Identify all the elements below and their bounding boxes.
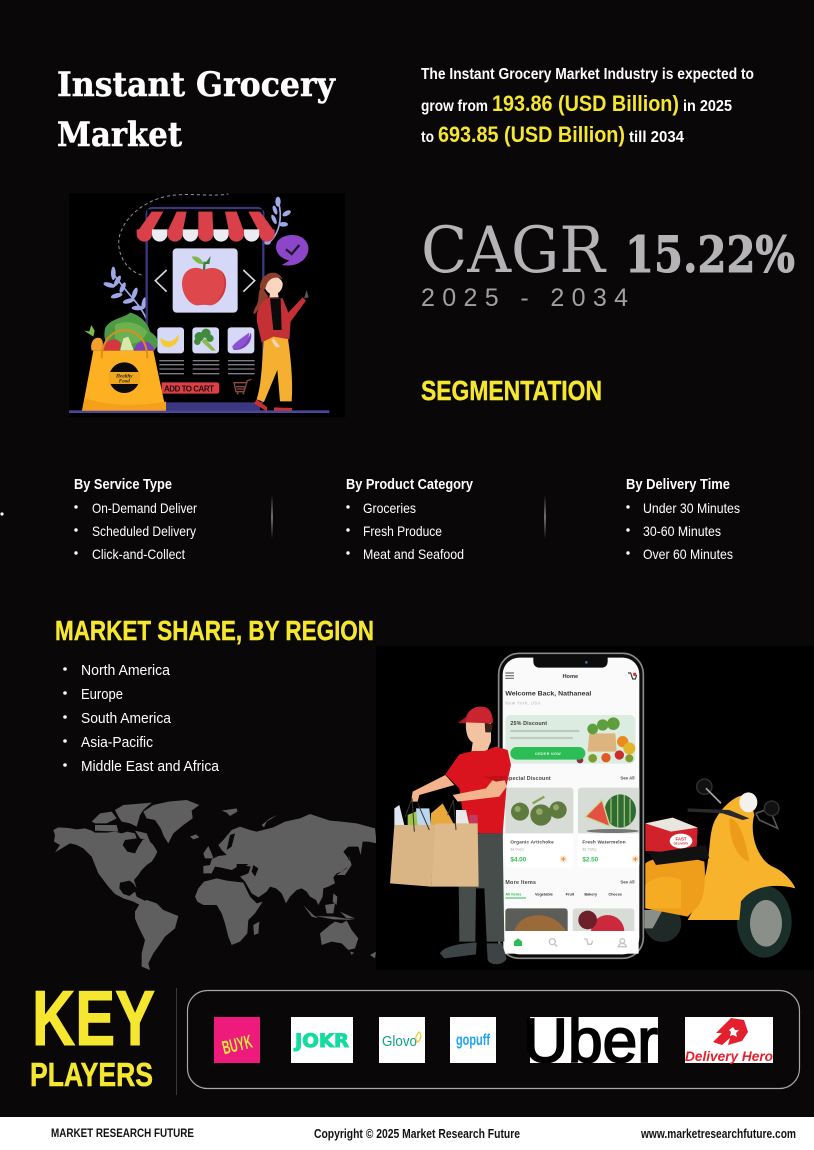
segment: by service type: On-Demand Deliver [92,500,197,516]
product cards [157,327,254,353]
smartphone: Fresh Watermelon [582,839,626,844]
key players heading [30,974,155,1093]
add to cart button [162,382,219,394]
segment: by delivery time: By Delivery Time [626,477,730,493]
smartphone: Bakery [584,892,598,896]
key players heading: PLAYERS [30,1056,153,1093]
smartphone: New York, USA [505,700,541,705]
smartphone: Fruit [566,892,575,896]
speech bubble [276,235,308,266]
discount banner [505,715,635,764]
smartphone: See All [620,776,635,781]
illustration: delivery man, phone and scooter [376,646,814,970]
smartphone: $4.00/pc [510,847,525,851]
market growth summary: till 2034 [629,129,684,146]
title: Market [57,115,182,155]
vegetables [84,313,158,351]
smartphone [499,653,643,958]
product: watermelon [578,788,639,868]
region list: Asia-Pacific [81,734,153,751]
segment: by product category: By Product Category [346,477,473,493]
ground and base [69,408,329,416]
smartphone: See All [620,880,635,885]
logo: gopuff: gopuff [456,1032,490,1049]
phone frame [147,208,263,405]
segment: by delivery time: 30-60 Minutes [643,523,721,539]
bags [394,805,404,825]
segment: by product category [346,477,473,562]
market growth summary [421,66,754,147]
segment: by product category: Meat and Seafood [363,546,464,562]
leaves: left [113,273,146,318]
leaves: top right [268,202,280,243]
grocery bag: Healthy [115,374,133,379]
region list: North America [81,662,171,679]
market growth summary: to [421,129,434,146]
more items: More Items [505,880,536,886]
smartphone: Special Discount [505,776,551,782]
region list: Europe [81,686,123,703]
smartphone: $2.50 [582,857,599,864]
CAGR: CAGR [421,214,607,288]
text lines [159,361,255,374]
heading: segmentation: SEGMENTATION [421,375,602,406]
smartphone: Welcome Back, Nathaneal [505,691,591,698]
segment: by product category: Groceries [363,500,416,516]
segment: by delivery time: Under 30 Minutes [643,500,740,516]
segment: by delivery time: Over 60 Minutes [643,546,733,562]
woman [254,273,309,411]
cart icon [234,379,251,392]
logo: JOKR [291,1017,353,1063]
logo: BUYK [214,1017,260,1063]
smartphone: $2.75/kg [582,847,596,851]
logo: Delivery Hero: Delivery Hero [685,1048,773,1064]
title: Instant Grocery [57,65,336,105]
grocery bag [82,330,166,411]
illustration: online grocery store phone [69,193,345,417]
market growth summary: in 2025 [683,98,732,115]
key players heading: KEY [32,974,155,1062]
footer [0,1117,814,1150]
smartphone: Vegetable [535,892,553,896]
CAGR [421,214,795,312]
market growth summary: The Instant Grocery Market Industry is expected to [421,66,754,83]
heading: market share by region: MARKET SHARE, BY REGION [55,615,374,646]
logo: Glovo [379,1017,425,1063]
smartphone: Home [562,674,578,680]
logo: JOKR: JOKR [293,1030,349,1052]
smartphone: $4.00 [510,857,527,864]
market growth summary: 193.86 (USD Billion) [492,91,679,116]
logo: gopuff [450,1017,496,1063]
add to cart button: ADD TO CART [164,384,214,393]
segment: by service type: Click-and-Collect [92,546,185,562]
segment: by delivery time [626,477,740,562]
market growth summary: 693.85 (USD Billion) [438,122,625,147]
delivery man [390,707,511,964]
scooter [644,779,795,958]
scooter: FAST [675,836,687,841]
segment: by service type: Scheduled Delivery [92,523,196,539]
segment: by service type [74,477,197,562]
region list: South America [81,710,172,727]
smartphone: Cheese [608,892,622,896]
smartphone: 25% Discount [510,721,547,727]
logo: Delivery Hero [685,1017,773,1064]
logo: Uber: Uber [523,1007,658,1076]
logo: BUYK: BUYK [220,1032,255,1059]
segment: by product category: Fresh Produce [363,523,442,539]
key players panel [188,990,800,1088]
segment: by service type: By Service Type [74,477,172,493]
CAGR: 2025 - 2034 [421,284,628,312]
grocery bag: Food [119,380,130,385]
region list [63,662,220,775]
market growth summary: grow from [421,98,488,115]
smartphone: Organic Artichoke [510,839,554,844]
logo: Glovo: Glovo [382,1033,417,1050]
scooter: DELIVERY [674,842,688,846]
smartphone: ORDER NOW [535,752,561,756]
footer: Copyright © 2025 Market Research Future [314,1127,520,1141]
region list: Middle East and Africa [81,758,220,775]
product: artichoke [505,788,573,868]
title [57,65,336,155]
awning [137,209,275,242]
arrows [155,270,255,292]
footer: MARKET RESEARCH FUTURE [51,1126,194,1140]
product card: apple [173,248,238,313]
world map [53,800,377,970]
smartphone: All Items [505,892,521,896]
